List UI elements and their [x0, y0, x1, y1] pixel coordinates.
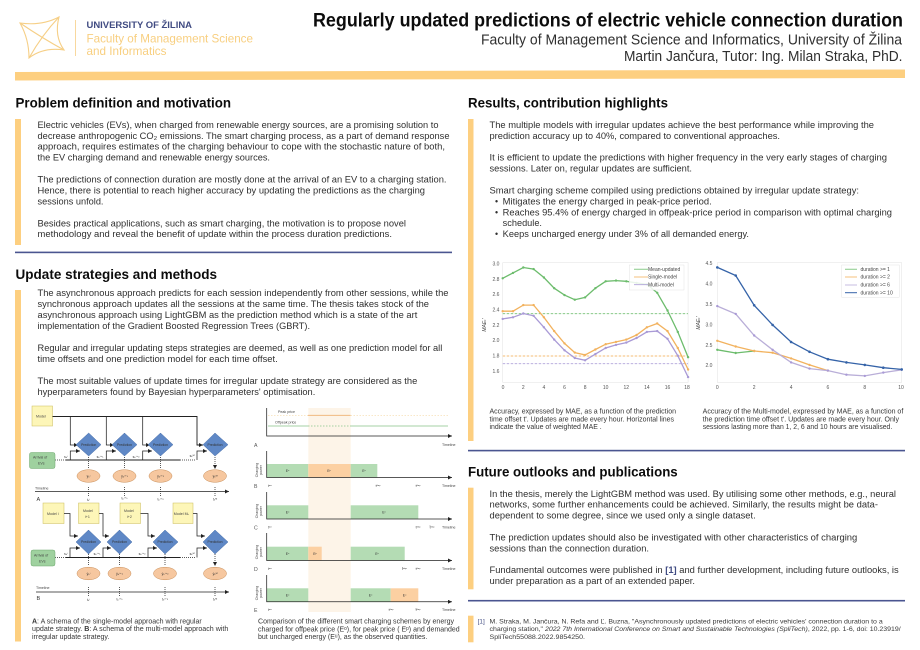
- legend: [842, 265, 899, 297]
- x axis ticks: 0: [502, 385, 505, 391]
- row B: uncontrolled charging: Eᵒ: [286, 469, 290, 473]
- text block: results: The multiple models with irregular updates achieve the best performance while improving the: [490, 120, 874, 130]
- timeline B: tₖⁱ⁺¹: [117, 598, 123, 602]
- subtitle: Martin Jančura, Tutor: Ing. Milan Straka, PhD.: [624, 48, 902, 65]
- timeline B: tₖⁱ: [87, 598, 90, 602]
- timeline A: [35, 454, 229, 503]
- y axis ticks: [706, 261, 713, 369]
- timeline B: B: [36, 596, 40, 602]
- row B: uncontrolled charging: Timeline: [442, 484, 455, 488]
- x axis ticks: 4: [790, 385, 793, 391]
- series: duration over 2: [717, 341, 828, 371]
- row E: late departure prediction: power: [259, 587, 263, 598]
- y axis label: MAEₜ': [696, 315, 702, 330]
- heading: problem definition: Problem definition and motivation: [16, 96, 231, 110]
- row D: early departure prediction: Timeline: [442, 567, 455, 571]
- model boxes: Model: [124, 509, 134, 513]
- row A: price levels: [254, 408, 455, 449]
- prediction diamonds: Prediction: [112, 540, 127, 544]
- row B: uncontrolled charging: power: [259, 464, 263, 475]
- timeline B: sₖⁱ: [64, 552, 68, 556]
- caption: chart 2: Accuracy of the Multi-model, expressed by MAE, as a function of: [703, 408, 903, 416]
- text block: future outlooks: In the thesis, merely the LightGBM method was used. By utilising some other methods, e.g., neural: [490, 489, 896, 499]
- prediction diamonds: Prediction: [81, 443, 96, 447]
- row E: late departure prediction: E: [254, 608, 258, 614]
- text block: results: [490, 120, 892, 239]
- text block: future outlooks: The prediction updates should also be investigated with other characteristics of charging: [490, 532, 857, 542]
- university name: and Informatics: [86, 44, 167, 58]
- y axis ticks: 2.6: [493, 292, 500, 298]
- row B: uncontrolled charging: tᵃʳʳ: [268, 484, 272, 488]
- prediction diamonds: Prediction: [153, 443, 168, 447]
- x axis ticks: 8: [863, 385, 866, 391]
- timeline B: Timeline: [36, 586, 49, 590]
- row D: early departure prediction: t̂ᵈᵉᵖ: [402, 567, 408, 571]
- prediction diamonds: Prediction: [207, 443, 223, 447]
- arrival box: [30, 452, 55, 468]
- series: duration over 10: [717, 267, 902, 369]
- timeline A: sₖⁱ⁺²: [133, 455, 140, 459]
- legend: duration >= 10: [860, 290, 893, 296]
- timeline A: Timeline: [35, 486, 48, 490]
- heading: update strategies: Update strategies and methods: [16, 267, 217, 282]
- text block: update strategies: asynchronous approach using LightGBM as the prediction method which is a state of the art: [38, 310, 418, 320]
- heading: results: Results, contribution highlights: [468, 96, 668, 110]
- text block: results: •: [495, 229, 498, 239]
- row B: uncontrolled charging: [254, 451, 455, 490]
- timeline A: tₖᴹ: [213, 498, 217, 502]
- x axis ticks: 2: [753, 385, 756, 391]
- row A: price levels: Offpeak price: [275, 420, 296, 424]
- text block: results: Keeps uncharged energy under 3% of all demanded energy.: [503, 229, 749, 239]
- timeline B: sₖᴹ: [190, 552, 195, 556]
- outcome ellipses: ŷₖⁱ⁺¹: [121, 474, 129, 478]
- row C: optimal charging: Timeline: [442, 526, 455, 530]
- timeline A: sₖⁱ: [64, 455, 68, 459]
- text block: problem: Besides practical applications, such as smart charging, the motivation is to propose novel: [38, 218, 406, 228]
- row C: optimal charging: C: [254, 526, 258, 532]
- caption: chart 2: [703, 408, 903, 431]
- row C: optimal charging: tᵃʳʳ: [268, 526, 272, 530]
- row E: late departure prediction: Charging: [255, 586, 259, 600]
- legend: Single-model: [648, 275, 677, 281]
- x axis ticks: 0: [716, 385, 719, 391]
- text block: results: It is efficient to update the predictions with higher frequency in the very early stages of charging: [490, 153, 887, 163]
- outcome ellipses: ŷₖⁱ: [87, 474, 91, 478]
- row B: uncontrolled charging: Eᵒ: [362, 469, 366, 473]
- timeline A: tₖⁱ⁺²: [158, 498, 164, 502]
- prediction diamonds: [76, 433, 228, 456]
- caption: diagrams A and B: A: A schema of the single-model approach with regular: [32, 618, 202, 626]
- arrival box: Arrival of: [33, 456, 47, 460]
- row D: early departure prediction: [254, 533, 455, 573]
- row E: late departure prediction: Timeline: [442, 608, 455, 612]
- row C: optimal charging: [254, 492, 455, 532]
- y axis ticks: 2.8: [493, 277, 500, 283]
- timeline A: sₖᴹ: [190, 454, 195, 458]
- accent bar: [15, 119, 21, 245]
- chart: multi-model MAE by session duration: [696, 261, 904, 391]
- y axis ticks: 1.8: [493, 354, 500, 360]
- reference text: SpliTech55088.2022.9854250.: [490, 634, 585, 641]
- x axis ticks: 18: [684, 385, 690, 391]
- text block: update strategies: The most suitable values of update times for irregular update strategy are considered as the: [38, 376, 417, 386]
- arrival box: Arrival of: [34, 554, 48, 558]
- series: single-model: [503, 305, 688, 370]
- row C: optimal charging: Charging: [255, 504, 259, 518]
- accent bar: [468, 488, 474, 589]
- caption: chart 1: time offset t'. Updates are made every hour. Horizontal lines: [490, 416, 675, 423]
- legend: duration >= 6: [860, 283, 890, 289]
- outcome ellipses: [77, 567, 226, 580]
- series: multi-model: [503, 314, 688, 377]
- y axis label: MAEₜ': [482, 317, 488, 332]
- legend: [629, 265, 684, 290]
- legend: Mean-updated: [648, 267, 680, 273]
- row C: optimal charging: power: [259, 505, 263, 516]
- row D: early departure prediction: D: [254, 567, 258, 573]
- reference text: M. Straka, M. Jančura, N. Refa and Ľ. Buzna, "Asynchronously updated predictions of electric vehicles' connection duration to a: [490, 618, 883, 626]
- outcome ellipses: ŷₖᴹ: [213, 572, 218, 576]
- text block: problem: Electric vehicles (EVs), when charged from renewable energy sources, are a promising solution to: [38, 120, 439, 130]
- model feed lines: [52, 416, 215, 469]
- caption: chart 2: sessions lasting more than 1, 2, 6 and 10 hours are visualised.: [703, 424, 892, 431]
- caption: charging schemes: Comparison of the different smart charging schemes by energy: [258, 618, 455, 626]
- row D: early departure prediction: Eᵒ: [375, 552, 379, 556]
- model boxes: i+2: [127, 515, 132, 519]
- legend: Multi-model: [648, 282, 674, 288]
- timeline A: sₖⁱ⁺¹: [97, 455, 104, 459]
- y axis ticks: 2.5: [706, 343, 713, 349]
- university name: UNIVERSITY OF ŽILINA: [86, 19, 192, 30]
- model boxes: Model i: [47, 512, 59, 516]
- timeline B: [36, 552, 229, 602]
- y axis ticks: 4.5: [706, 261, 713, 267]
- y axis ticks: 4.0: [706, 282, 713, 288]
- text block: problem: [38, 120, 450, 239]
- text block: results: •: [495, 208, 498, 218]
- subtitle: [481, 32, 903, 65]
- x axis ticks: 2: [522, 385, 525, 391]
- caption: chart 1: indicate the value of weighted MAE .: [490, 424, 602, 431]
- row E: late departure prediction: tᵈᵉᵖ: [389, 608, 394, 612]
- prediction diamonds: Prediction: [81, 540, 96, 544]
- y axis ticks: 2.4: [493, 308, 500, 314]
- row B: uncontrolled charging: Charging: [255, 463, 259, 477]
- model boxes: i+1: [85, 515, 90, 519]
- row D: early departure prediction: power: [259, 546, 263, 557]
- row B: uncontrolled charging: tᵈᵉᵖ: [416, 484, 421, 488]
- prediction diamonds: [76, 530, 228, 554]
- row C: optimal charging: Eᵒ: [382, 510, 386, 514]
- arrival box: EVs: [38, 462, 45, 466]
- x axis ticks: 12: [624, 385, 629, 391]
- text block: results: sessions. Later on, regular updates are sufficient.: [490, 164, 692, 174]
- text block: future outlooks: sessions than the connection duration.: [490, 544, 649, 554]
- y axis ticks: 2.2: [493, 323, 500, 329]
- model boxes: [43, 503, 193, 524]
- model box: [32, 406, 52, 426]
- text block: results: Mitigates the energy charged in peak-price period.: [503, 196, 712, 206]
- caption: diagrams A and B: [32, 618, 228, 641]
- header bar: [15, 70, 905, 80]
- legend: duration >= 2: [860, 275, 890, 281]
- panel: update strategies and methods: [15, 267, 460, 642]
- caption: diagrams A and B: update strategy. B: A schema of the multi-model approach with: [32, 626, 228, 633]
- plot frame: [503, 263, 688, 382]
- row B: uncontrolled charging: tᵈᵉᵖ: [376, 484, 381, 488]
- chart: MAE by time offset: [482, 262, 690, 391]
- legend: duration >= 1: [860, 267, 890, 273]
- x axis ticks: 8: [584, 385, 587, 391]
- diagram: single-model regular updates (A): [30, 406, 229, 503]
- timeline B: tₖⁱ⁺²: [162, 598, 169, 602]
- accent bar: [468, 119, 474, 441]
- text block: problem: decrease anthropogenic CO₂ emissions. The smart charging process, as a part of demand response: [38, 131, 450, 141]
- text block: future outlooks: [490, 489, 899, 586]
- x axis ticks: [716, 385, 904, 391]
- row D: early departure prediction: Charging: [255, 545, 259, 559]
- caption: diagrams A and B: irregular update strategy.: [32, 634, 109, 641]
- outcome ellipses: [77, 470, 226, 482]
- outcome ellipses: ŷₖᴹ: [213, 474, 218, 478]
- row E: late departure prediction: Eᵘ: [403, 594, 407, 598]
- model feed lines: [55, 514, 215, 566]
- row D: early departure prediction: Eᵒ: [286, 552, 290, 556]
- row E: late departure prediction: Eᵒ: [369, 594, 373, 598]
- row C: optimal charging: Eᵒ: [286, 510, 290, 514]
- accent bar: [15, 290, 21, 642]
- text block: problem: The predictions of connection duration are mostly done at the arrival of an EV to a charging station.: [38, 175, 447, 185]
- logo divider: [74, 20, 77, 56]
- y axis ticks: 1.6: [493, 369, 500, 375]
- row D: early departure prediction: tᵃʳʳ: [268, 567, 272, 571]
- x axis ticks: 4: [543, 385, 546, 391]
- y axis ticks: [493, 262, 500, 375]
- row B: uncontrolled charging: B: [254, 484, 258, 490]
- caption: chart 2: the prediction time offset t'. Updates are made every hour. Only: [703, 416, 900, 423]
- row E: late departure prediction: [254, 575, 455, 614]
- model boxes: Model Mₖ: [174, 512, 190, 516]
- timeline B: tₖᴹ: [213, 598, 217, 602]
- row A: price levels: Timeline: [442, 443, 455, 447]
- series: mean-updated: [503, 268, 688, 357]
- text block: update strategies: time offsets and one prediction model for each time offset.: [38, 354, 278, 364]
- panel: results and contribution highlights: [468, 96, 904, 441]
- text block: update strategies: implementation of the Gradient Boosted Regression Trees (GBRT).: [38, 321, 310, 331]
- row C: optimal charging: tᵈᵉᵖ: [416, 526, 421, 530]
- outcome ellipses: ŷₖⁱ: [87, 572, 91, 576]
- plot frame: [717, 263, 902, 382]
- x axis ticks: 10: [603, 385, 609, 391]
- reference text: charging station," 2022 7th International Conference on Smart and Sustainable Technologies (SpliTech) , 2022, pp. 1-6, doi: 10.23919/: [490, 626, 901, 633]
- timeline B: sₖⁱ⁺¹: [94, 552, 101, 556]
- row E: late departure prediction: Eᵒ: [286, 594, 290, 598]
- text block: update strategies: [38, 288, 449, 397]
- panel: reference: [468, 616, 901, 642]
- peak price shaded band: [308, 408, 351, 612]
- row B: uncontrolled charging: Eᵖ: [327, 469, 331, 473]
- series: duration over 1: [717, 350, 754, 353]
- text block: future outlooks: under preparation as a part of an extended paper.: [490, 576, 695, 586]
- text block: update strategies: The asynchronous approach predicts for each session independently from other sessions, while the: [38, 288, 449, 298]
- caption: charging schemes: but uncharged energy (Eᵘ), as the observed quantities.: [258, 634, 427, 641]
- x axis ticks: 10: [898, 385, 904, 391]
- x axis ticks: 6: [563, 385, 566, 391]
- row E: late departure prediction: t̂ᵈᵉᵖ: [415, 608, 421, 612]
- text block: results: Smart charging scheme compiled using predictions obtained by irregular update strategy:: [490, 186, 859, 196]
- row D: early departure prediction: tᵈᵉᵖ: [416, 567, 421, 571]
- logo: university star: [20, 17, 64, 58]
- text block: future outlooks: Fundamental outcomes were published in [1] and further development, including future outlooks, is: [490, 565, 899, 575]
- series: duration over 6: [717, 306, 902, 376]
- text block: problem: sessions unfold.: [38, 196, 104, 206]
- model box: Model: [36, 414, 46, 418]
- university name: [86, 19, 253, 58]
- caption: chart 1: [490, 408, 676, 431]
- timeline A: tₖⁱ⁺¹: [122, 496, 128, 500]
- y axis ticks: 3.5: [706, 302, 713, 308]
- reference text: [490, 618, 901, 641]
- text block: problem: approach, requires estimates of the charging behaviour to cope with the stochastic nature of both,: [38, 142, 445, 152]
- row E: late departure prediction: tᵃʳʳ: [268, 608, 272, 612]
- x axis ticks: 6: [827, 385, 830, 391]
- diagram: smart charging schemes comparison: [254, 408, 455, 614]
- x axis ticks: 16: [665, 385, 670, 391]
- accent bar: [468, 616, 474, 642]
- reference marker: [1]: [478, 618, 485, 626]
- timeline A: A: [36, 497, 40, 503]
- text block: update strategies: synchronous approach updates all the sessions at the same time. The thesis takes stock of the: [38, 299, 429, 309]
- prediction diamonds: Prediction: [207, 540, 223, 544]
- text block: update strategies: Regular and irregular updating steps strategies are deemed, as well as one prediction model for all: [38, 343, 442, 353]
- caption: charging schemes: charged for offpeak price (Eᵒ), for peak price ( Eᵖ) and demanded: [258, 626, 460, 633]
- y axis ticks: 2.0: [493, 338, 500, 344]
- university name: Faculty of Management Science: [86, 32, 253, 46]
- outcome ellipses: ŷₖⁱ⁺²: [162, 572, 169, 576]
- outcome ellipses: ŷₖⁱ⁺¹: [116, 572, 124, 576]
- arrival box: EVs: [39, 560, 46, 564]
- text block: update strategies: hyperparameters found by Bayesian hyperparameters' optimisation.: [38, 387, 315, 397]
- x axis ticks: [502, 385, 690, 391]
- caption: chart 1: Accuracy, expressed by MAE, as a function of the prediction: [490, 408, 676, 416]
- heading: future outlooks: Future outlooks and publications: [468, 464, 678, 480]
- caption: charging schemes: [258, 618, 460, 641]
- panel: problem definition and motivation: [15, 96, 450, 245]
- text block: future outlooks: dependent to some degree, since we used only a single dataset.: [490, 511, 756, 521]
- outcome ellipses: ŷₖⁱ⁺²: [157, 474, 165, 478]
- x axis ticks: 14: [644, 385, 650, 391]
- text block: results: •: [495, 196, 498, 206]
- y axis ticks: 2.0: [706, 363, 713, 369]
- row C: optimal charging: t̂ᵈᵉᵖ: [429, 525, 435, 530]
- model boxes: Model: [83, 509, 93, 513]
- text block: problem: Hence, there is potential to reach higher accuracy by updating the predictions as the charging: [38, 186, 425, 196]
- text block: problem: methodology and reveal the benefit of update within the process duration predictions.: [38, 229, 392, 239]
- text block: results: schedule.: [503, 218, 542, 228]
- arrival box: [31, 550, 55, 566]
- row A: price levels: Peak price: [278, 410, 295, 414]
- prediction diamonds: Prediction: [157, 540, 173, 544]
- timeline A: tₖⁱ: [87, 498, 90, 502]
- prediction diamonds: Prediction: [117, 443, 132, 447]
- weighted MAE lines: [503, 314, 688, 364]
- text block: problem: the EV charging demand and renewable energy sources.: [38, 153, 270, 163]
- panel: future outlooks and publications: [468, 464, 899, 589]
- text block: results: Reaches 95.4% of energy charged in offpeak-price period in comparison with optimal charging: [503, 208, 892, 218]
- text block: results: prediction accuracy up to 40%, compared to conventional approaches.: [490, 131, 780, 141]
- row A: price levels: A: [254, 443, 258, 449]
- y axis ticks: 3.0: [493, 262, 500, 268]
- text block: future outlooks: networks, some further enhancements could be achieved. Similarly, the results might be data-: [490, 500, 878, 510]
- row D: early departure prediction: Eᵖ: [313, 552, 317, 556]
- y axis ticks: 3.0: [706, 322, 713, 328]
- diagram: multi-model irregular updates (B): [31, 503, 229, 602]
- subtitle: Faculty of Management Science and Informatics, University of Žilina: [481, 32, 903, 48]
- timeline B: sₖⁱ⁺²: [139, 552, 146, 556]
